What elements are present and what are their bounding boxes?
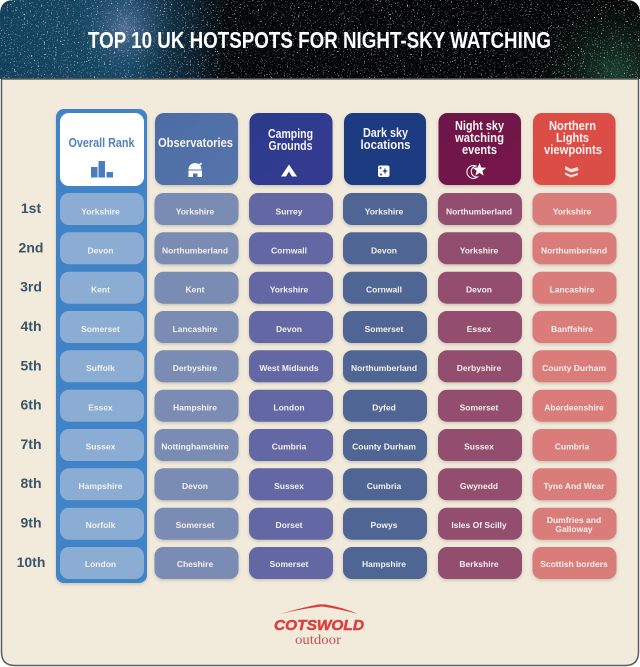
- icon: observatory: [188, 162, 202, 177]
- header: dark sky locations: [344, 113, 426, 185]
- header: camping grounds: Camping: [268, 127, 313, 141]
- column: camping grounds: [249, 113, 333, 579]
- night sky names: Isles Of Scilly: [451, 520, 507, 530]
- observatories names: Somerset: [176, 520, 215, 530]
- northern lights names: Aberdeenshire: [544, 402, 604, 412]
- column: observatories: [154, 113, 238, 579]
- northern lights names: Cumbria: [555, 442, 590, 452]
- observatories names: Devon: [182, 481, 208, 491]
- overall rank names: Norfolk: [86, 520, 116, 530]
- observatories cells: [154, 193, 238, 579]
- logo wordmark: COTSWOLD: [274, 617, 364, 634]
- observatories names: Cheshire: [177, 559, 213, 569]
- starry sky banner: [0, 0, 640, 79]
- camping names: Cumbria: [272, 442, 307, 452]
- night sky names: Somerset: [460, 402, 499, 412]
- observatories names: Derbyshire: [173, 363, 217, 373]
- logo subtitle: outdoor: [295, 633, 341, 648]
- rank labels: [17, 200, 45, 570]
- northern lights names: Tyne And Wear: [544, 481, 605, 491]
- rank labels: 10th: [17, 554, 45, 570]
- header: camping grounds: [250, 113, 332, 185]
- camping cells: [249, 193, 333, 579]
- column: overall rank: [56, 109, 147, 583]
- logo: Cotswold Outdoor: [274, 604, 364, 648]
- header: overall rank: Overall Rank: [68, 136, 135, 150]
- overall rank names: London: [85, 559, 116, 569]
- rank labels: 7th: [20, 436, 42, 452]
- night sky cells: [438, 193, 522, 579]
- overall rank names: Devon: [88, 246, 113, 256]
- dark sky names: Powys: [371, 520, 398, 530]
- header: night sky watching events: events: [462, 143, 497, 157]
- header: night sky watching events: [438, 113, 521, 185]
- rank labels: 8th: [20, 475, 42, 491]
- overall rank cells: [60, 193, 144, 579]
- observatories names: Lancashire: [173, 324, 218, 334]
- logo roof arc: [280, 604, 358, 614]
- dark sky names: Hampshire: [362, 559, 406, 569]
- header: night sky watching events: watching: [454, 131, 504, 145]
- camping names: [259, 206, 319, 569]
- night sky names: Northumberland: [446, 206, 512, 216]
- northern lights names: Northumberland: [541, 246, 607, 256]
- overall rank names: Essex: [88, 402, 113, 412]
- camping names: Somerset: [270, 559, 309, 569]
- overall rank names: [79, 206, 123, 569]
- night sky names: Sussex: [464, 442, 494, 452]
- camping names: Cornwall: [271, 246, 307, 256]
- overall rank names: Hampshire: [79, 481, 123, 491]
- overall rank names: Somerset: [81, 324, 120, 334]
- observatories names: Kent: [186, 284, 205, 294]
- rank labels: 1st: [21, 200, 41, 216]
- icon: tent: [281, 164, 297, 176]
- camping names: Yorkshire: [270, 284, 309, 294]
- overall rank names: Suffolk: [86, 363, 115, 373]
- dark sky names: Somerset: [365, 324, 404, 334]
- camping names: Sussex: [274, 481, 304, 491]
- icon: bar chart: [91, 161, 113, 178]
- northern lights names: County Durham: [542, 363, 606, 373]
- dark sky names: Cornwall: [366, 284, 402, 294]
- night sky names: Berkshire: [459, 559, 499, 569]
- rank labels: 6th: [20, 396, 42, 412]
- rank labels: 9th: [20, 514, 42, 530]
- icon: aurora: [565, 166, 578, 178]
- northern lights names: Dumfries and: [547, 515, 601, 525]
- column: night sky watching events: [438, 113, 522, 579]
- camping names: Devon: [276, 324, 302, 334]
- northern lights names: Yorkshire: [553, 206, 592, 216]
- northern lights cells: [532, 193, 616, 579]
- header: northern lights viewpoints: [533, 113, 616, 185]
- header: northern lights viewpoints: Lights: [556, 131, 589, 145]
- camping names: Surrey: [276, 206, 303, 216]
- night sky names: [446, 206, 512, 569]
- header: night sky watching events: Night sky: [455, 119, 504, 133]
- overall rank names: Sussex: [86, 442, 116, 452]
- column: dark sky locations: [343, 113, 427, 579]
- dark sky names: [351, 206, 417, 569]
- northern lights names: Scottish borders: [540, 559, 608, 569]
- observatories names: Yorkshire: [176, 206, 215, 216]
- column: northern lights viewpoints: [532, 113, 616, 579]
- northern lights names: Banffshire: [551, 324, 593, 334]
- header: dark sky locations: Dark sky: [363, 126, 408, 140]
- observatories names: Nottinghamshire: [161, 442, 229, 452]
- observatories names: Northumberland: [162, 246, 228, 256]
- rank labels: 2nd: [19, 240, 43, 256]
- camping names: London: [273, 402, 305, 412]
- camping names: West Midlands: [259, 363, 319, 373]
- overall rank names: Yorkshire: [81, 206, 120, 216]
- rank labels: 4th: [20, 318, 42, 334]
- title: TOP 10 UK HOTSPOTS FOR NIGHT-SKY WATCHING: [88, 27, 551, 53]
- camping names: Dorset: [276, 520, 303, 530]
- night sky names: Gwynedd: [460, 481, 498, 491]
- icon: dark sky square: [378, 166, 390, 177]
- northern lights names: [540, 206, 608, 569]
- header: camping grounds: Grounds: [268, 139, 313, 153]
- night sky names: Devon: [466, 284, 492, 294]
- northern lights names: Lancashire: [550, 284, 595, 294]
- night sky names: Derbyshire: [457, 363, 501, 373]
- dark sky names: Cumbria: [367, 481, 402, 491]
- observatories names: Hampshire: [173, 402, 217, 412]
- icon: moon and star: [467, 163, 486, 178]
- observatories names: [161, 206, 229, 569]
- header: dark sky locations: locations: [360, 138, 411, 152]
- header: northern lights viewpoints: viewpoints: [544, 143, 602, 157]
- dark sky names: Dyfed: [372, 402, 396, 412]
- overall rank names: Kent: [91, 284, 110, 294]
- header: northern lights viewpoints: Northern: [549, 119, 596, 133]
- rank labels: 3rd: [20, 278, 42, 294]
- northern lights names: Galloway: [555, 524, 593, 534]
- header: overall rank: [60, 113, 144, 186]
- dark sky names: Yorkshire: [365, 206, 404, 216]
- dark sky cells: [343, 193, 427, 579]
- dark sky names: County Durham: [352, 442, 416, 452]
- night sky names: Yorkshire: [460, 246, 499, 256]
- header: observatories: Observatories: [158, 136, 233, 150]
- night sky names: Essex: [467, 324, 492, 334]
- dark sky names: Northumberland: [351, 363, 417, 373]
- header: observatories: [155, 113, 238, 185]
- dark sky names: Devon: [371, 246, 397, 256]
- rank labels: 5th: [20, 358, 42, 374]
